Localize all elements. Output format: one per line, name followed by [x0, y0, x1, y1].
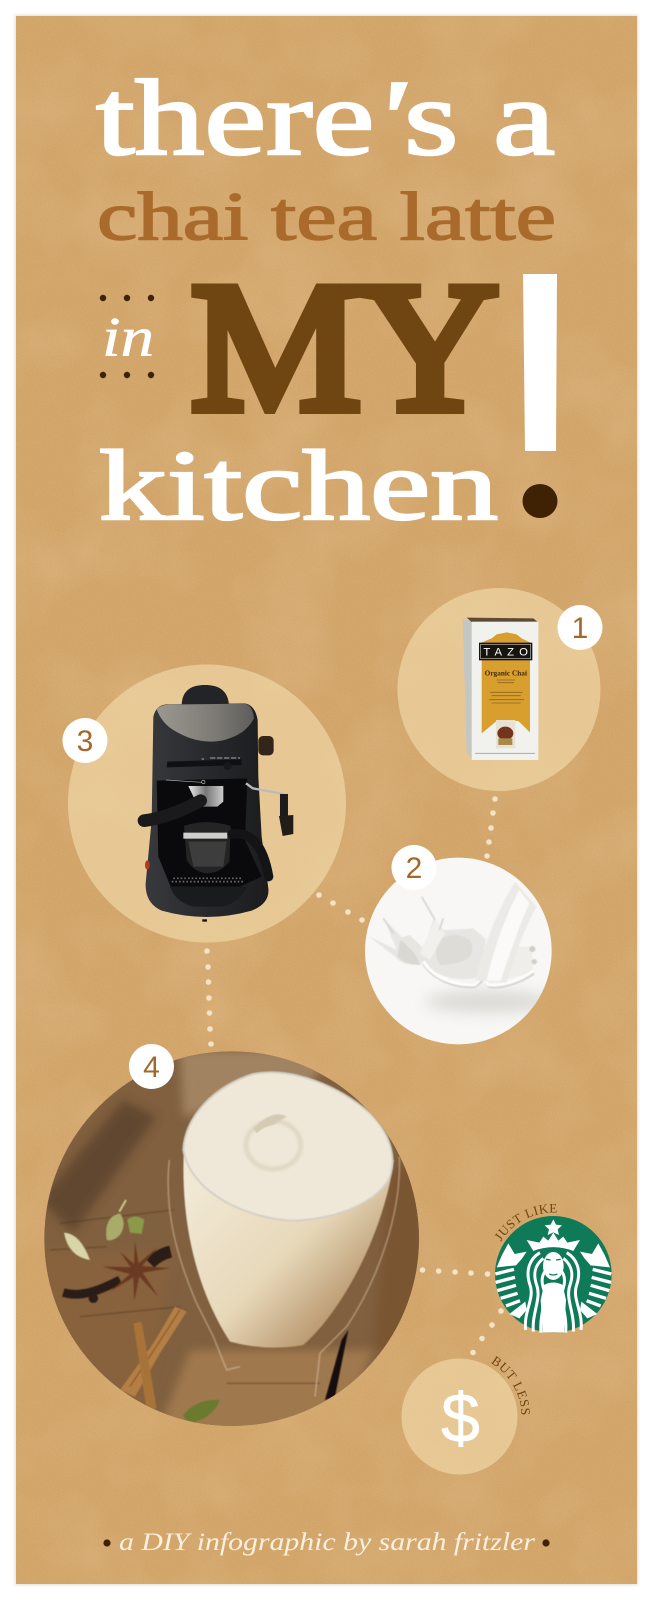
- badge: number 3: 3: [77, 725, 93, 758]
- icon: Tazo tea box: Organic Chai: [485, 669, 527, 677]
- step 3 circle: [68, 664, 346, 942]
- arc label: JUST LIKE: JUST LIKE: [494, 1204, 556, 1242]
- icon: Tazo tea box: TAZO: [483, 647, 528, 659]
- badge: number 1: 1: [572, 612, 588, 645]
- title word: in, with dots: [100, 295, 154, 378]
- icon: Tazo tea box: [463, 618, 538, 760]
- dollar circle: $: [441, 1379, 480, 1457]
- title line: kitchen: kitchen: [99, 430, 498, 541]
- title word: MY: MY: [191, 245, 499, 449]
- badge: number 3: [62, 718, 108, 763]
- badge: number 4: [129, 1044, 174, 1089]
- badge: number 2: [392, 845, 436, 890]
- connector dots: 3 to 4: [204, 948, 214, 1047]
- connector dots: 2 to 3: [316, 892, 365, 923]
- step 1 circle: [398, 588, 600, 791]
- badge: number 4: 4: [143, 1051, 160, 1084]
- step 4 chai latte photo: [40, 1050, 425, 1435]
- icon: Starbucks-style siren logo: [495, 1216, 612, 1333]
- connector dots: latte to Starbucks: [420, 1267, 490, 1277]
- connector dots: Starbucks to dollar: [470, 1308, 504, 1355]
- exclamation mark: [522, 274, 558, 518]
- badge: number 1: [558, 605, 602, 650]
- title line: chai tea latte: chai tea latte: [97, 178, 556, 254]
- step 2 milk splash circle: [365, 858, 552, 1044]
- footer credit line: a DIY infographic by sarah fritzler: [119, 1529, 535, 1556]
- arc label: BUT LESS: BUT LESS: [491, 1356, 530, 1414]
- title word: in, with dots: in: [102, 307, 154, 369]
- title line: there's a: there 's a: [96, 59, 555, 178]
- dollar circle: [402, 1358, 518, 1474]
- badge: number 2: 2: [406, 852, 422, 885]
- connector dots: 1 to 2: [484, 796, 498, 859]
- icon: espresso machine: [144, 685, 293, 922]
